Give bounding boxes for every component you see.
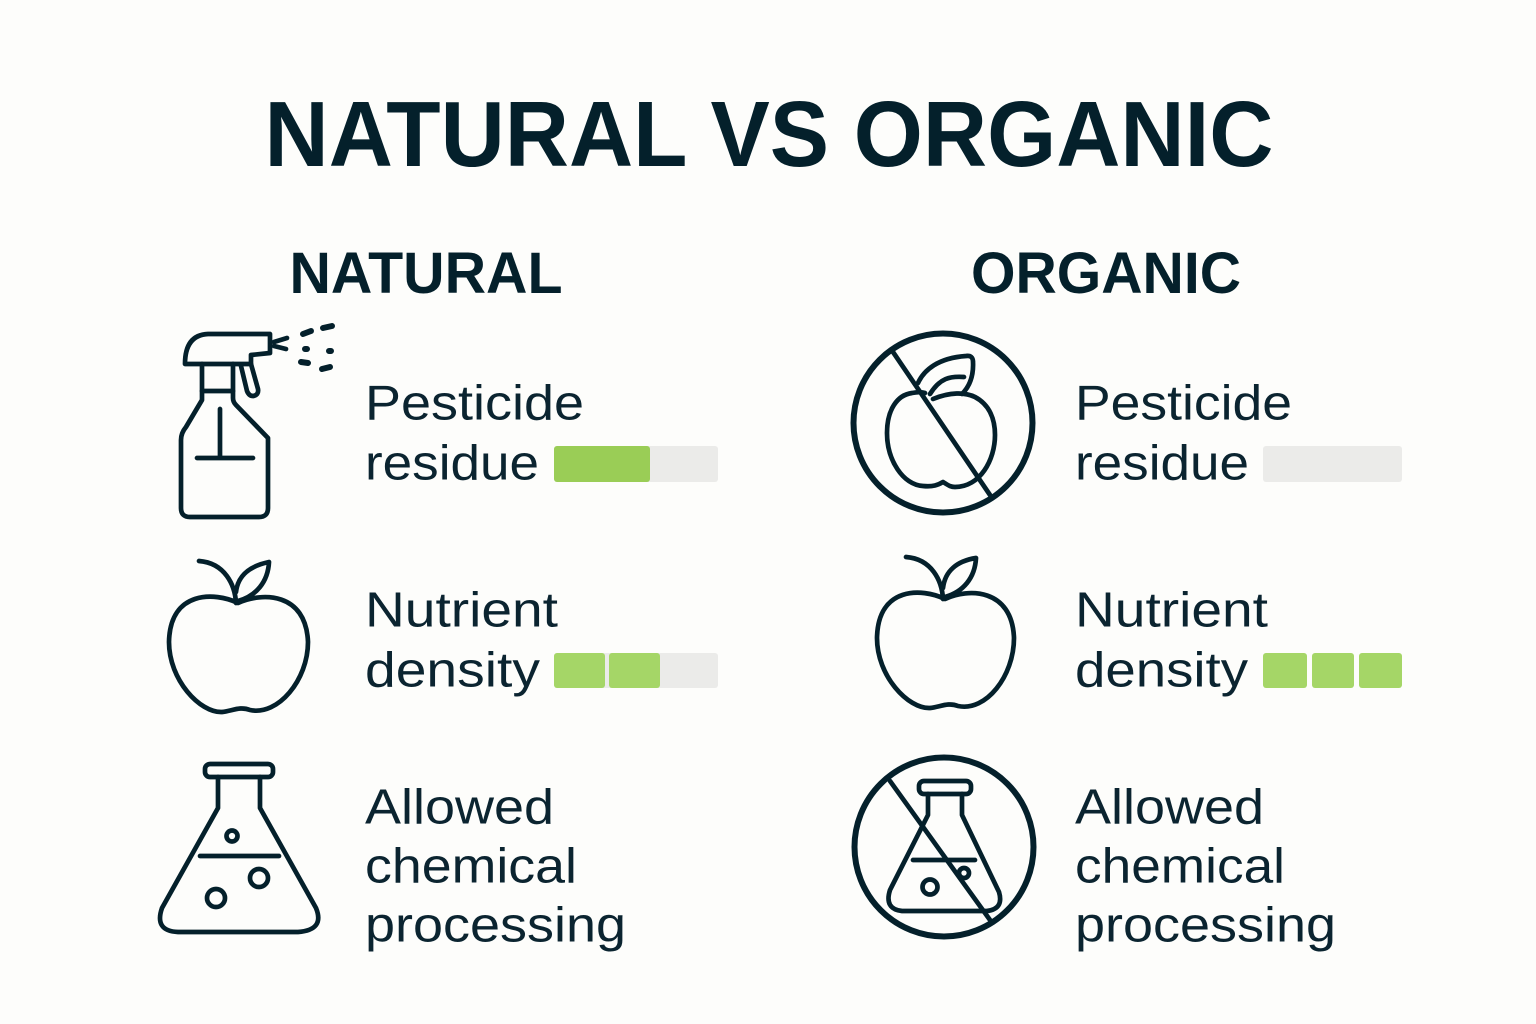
nutrient bar [554,653,718,688]
nutrient bar [1263,653,1402,688]
nutrient label [1075,584,1268,698]
pesticide label [1075,376,1292,490]
chemical label: Allowed [365,780,554,834]
pesticide bar [1263,446,1402,482]
title: NATURAL VS ORGANIC [264,82,1274,186]
pesticide bar [554,446,718,482]
icon: spray bottle [181,326,332,517]
panel: natural [160,241,718,952]
chemical label [365,780,626,952]
icon: no flask [854,758,1034,936]
icon: no apple [854,334,1032,512]
chemical label: Allowed [1075,780,1264,834]
pesticide label: residue [365,436,539,490]
pesticide label: Pesticide [1075,376,1292,430]
organic heading: ORGANIC [971,241,1241,306]
nutrient label [365,584,558,698]
nutrient label: density [1075,644,1249,698]
pesticide label: residue [1075,436,1249,490]
pesticide label [365,376,584,490]
icon: apple [169,561,308,712]
nutrient label: Nutrient [365,584,558,638]
chemical label: processing [1075,898,1336,952]
pesticide label: Pesticide [365,376,584,430]
nutrient label: density [365,644,541,698]
chemical label [1075,780,1336,952]
chemical label: chemical [365,840,577,894]
panel: organic [854,241,1402,952]
nutrient label: Nutrient [1075,584,1268,638]
natural heading: NATURAL [290,241,562,306]
icon: flask [160,764,318,932]
chemical label: processing [365,898,626,952]
chemical label: chemical [1075,840,1285,894]
icon: apple [877,557,1014,708]
